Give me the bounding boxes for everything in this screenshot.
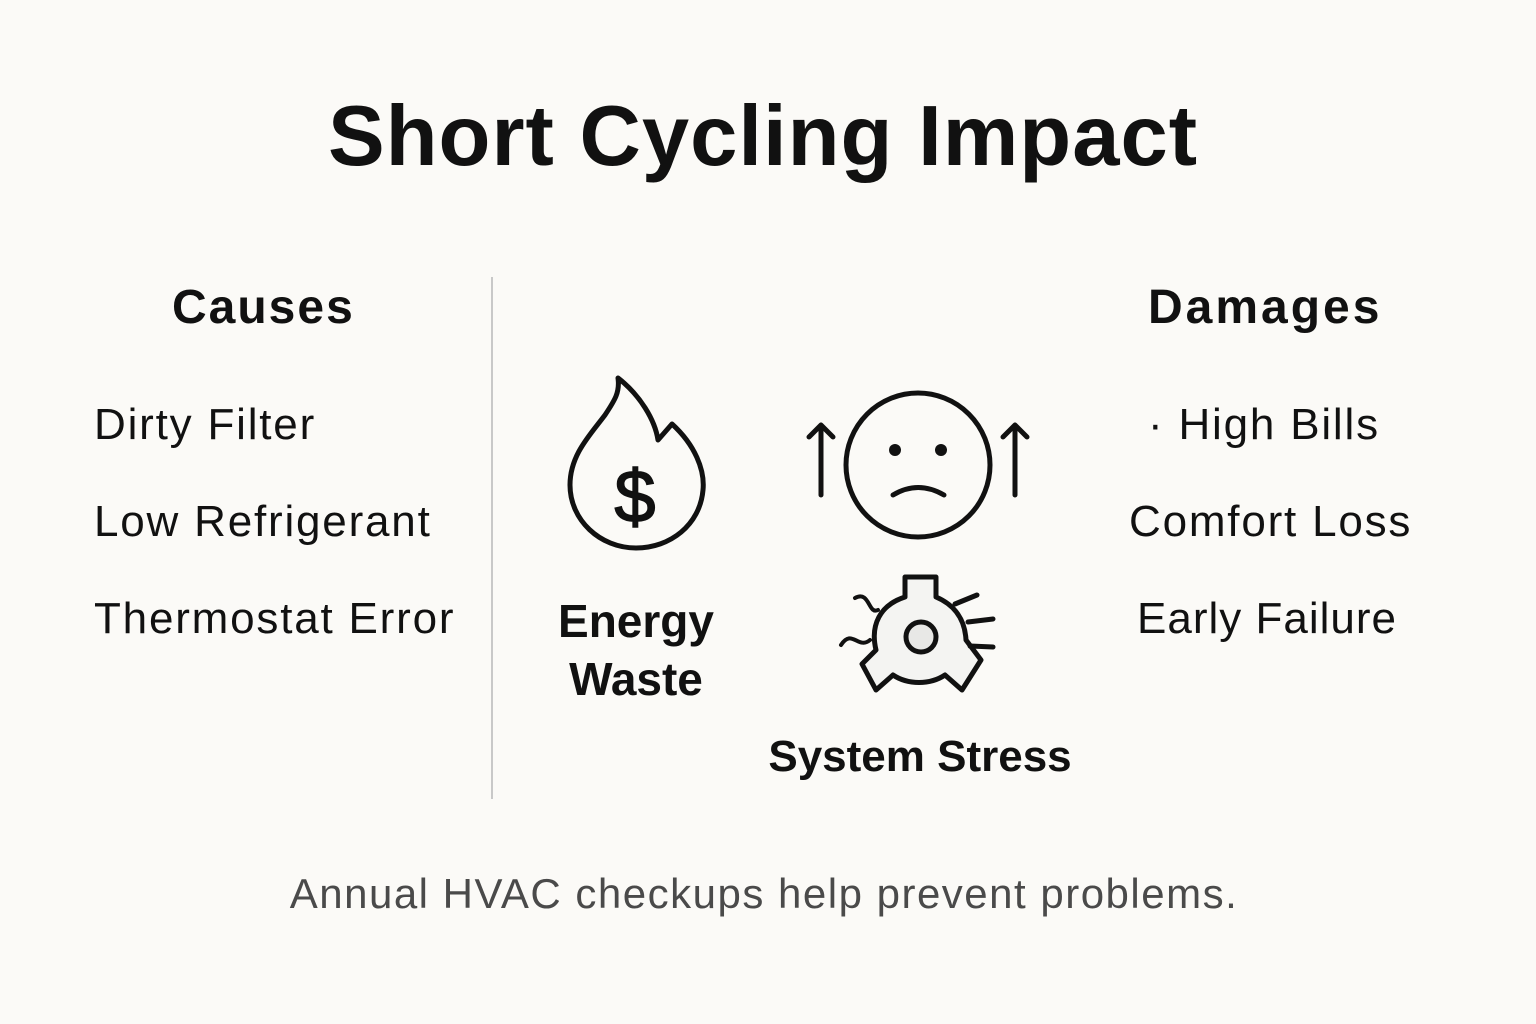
damage: comfort loss: Comfort Loss: [1129, 497, 1412, 546]
label: energy waste: Energy: [558, 595, 714, 647]
icon: flame with dollar: [568, 376, 706, 550]
footer note: Annual HVAC checkups help prevent problems.: [290, 870, 1238, 917]
heading: causes: Causes: [172, 281, 355, 334]
damage: early failure: Early Failure: [1137, 594, 1397, 643]
icon: flame with dollar: $: [614, 455, 656, 538]
cause: low refrigerant: Low Refrigerant: [94, 497, 432, 546]
cause: thermostat error: Thermostat Error: [94, 594, 455, 643]
divider: [491, 277, 493, 799]
panel: causes: [94, 281, 455, 643]
label: energy waste: [558, 595, 714, 705]
cause: dirty filter: Dirty Filter: [94, 400, 316, 449]
heading: damages: Damages: [1148, 281, 1382, 334]
label: energy waste: Waste: [569, 653, 703, 705]
damage: high bills: · High Bills: [1148, 400, 1380, 449]
panel: damages: [1129, 281, 1412, 643]
icon: sad face with arrows: [806, 390, 1030, 540]
title: Short Cycling Impact: [328, 89, 1198, 184]
icon: stressed gear: [838, 574, 996, 692]
label: system stress: System Stress: [768, 732, 1072, 781]
